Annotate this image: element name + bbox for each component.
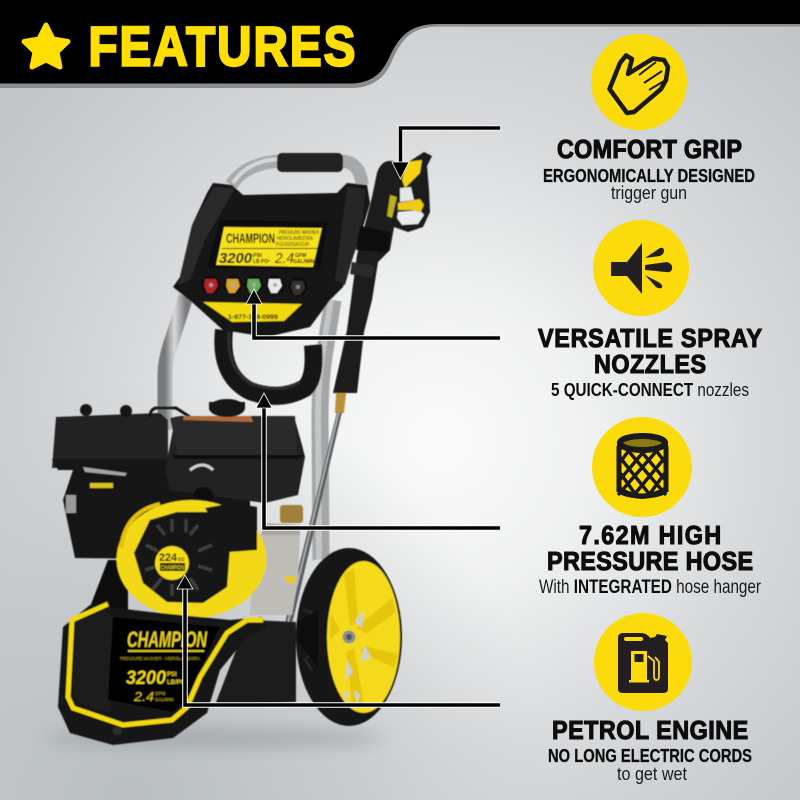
control panel: 3200 — [219, 250, 253, 267]
control panel: CHAMPION — [226, 230, 275, 246]
control panel: GPM — [295, 253, 306, 259]
base branding: GPM — [155, 691, 166, 696]
wheel — [296, 548, 402, 726]
callout arrow: spray nozzles — [246, 289, 500, 338]
title: FEATURES — [88, 16, 355, 78]
floor — [0, 380, 600, 800]
heading: NOZZLES — [594, 351, 706, 379]
panel label — [216, 227, 322, 267]
callout arrow: hose — [256, 393, 500, 528]
control panel — [173, 183, 370, 337]
base branding — [120, 627, 208, 704]
heading: COMFORT GRIP — [557, 136, 742, 164]
base branding: 2.4 — [133, 689, 154, 704]
description: 5 QUICK-CONNECT nozzles — [551, 379, 749, 400]
engine — [52, 399, 305, 612]
heading: PRESSURE HOSE — [547, 548, 753, 576]
hose coil — [223, 330, 314, 396]
frame tubes — [165, 153, 362, 560]
icon: spray — [593, 220, 689, 316]
control panel: PRESSURE WASHER — [279, 230, 319, 236]
icon: hand — [591, 34, 687, 130]
spray nozzles — [202, 276, 308, 296]
description: With INTEGRATED hose hanger — [539, 577, 762, 598]
base branding: 3200 — [126, 668, 166, 689]
spray gun and wand — [265, 152, 432, 706]
yellow instruction strip — [203, 302, 302, 322]
badge: 224cc: 224 — [159, 552, 178, 564]
recoil starter — [116, 500, 266, 618]
description: to get wet — [617, 764, 687, 784]
icon: petrol can — [594, 613, 692, 711]
heading: PETROL ENGINE — [552, 717, 748, 745]
header band — [0, 0, 800, 88]
callout arrow: petrol engine — [177, 575, 500, 705]
feature: hose — [539, 417, 762, 598]
badge: 224cc: cc — [178, 557, 185, 563]
base branding: LB/PO² — [167, 679, 187, 686]
heading: 7.62M HIGH — [579, 522, 721, 550]
description: ERGONOMICALLY DESIGNED — [543, 165, 755, 186]
base shell — [58, 604, 296, 745]
feature: comfort grip — [543, 34, 755, 203]
base branding: GAL/MIN — [155, 697, 174, 702]
callout arrow: comfort grip — [392, 128, 500, 179]
heading: VERSATILE SPRAY — [538, 325, 763, 353]
description: trigger gun — [611, 183, 687, 203]
control panel: PSI — [253, 253, 262, 259]
control panel: PULVERISATEUR — [276, 242, 309, 248]
control panel: LB PO² — [253, 259, 270, 265]
control panel: 1-877-338-0999 — [228, 315, 279, 321]
control panel: HIDROLAVADORA — [277, 236, 314, 242]
base branding: CHAMPION — [127, 627, 208, 652]
pressure washer product — [52, 152, 432, 745]
floor shadow — [45, 727, 385, 749]
control panel: GAL/MIN — [293, 259, 314, 265]
control panel: 2.4 — [274, 250, 294, 267]
feature: petrol engine — [548, 613, 752, 784]
base branding: PSI — [167, 672, 177, 678]
badge: 224cc: CHAMPION — [161, 564, 184, 572]
badge: 224cc — [155, 546, 189, 580]
pump — [250, 505, 303, 615]
icon: star — [24, 25, 68, 67]
description: NO LONG ELECTRIC CORDS — [548, 745, 752, 766]
base branding: PRESSURE WASHER · HIDROLAVADORA — [120, 656, 200, 661]
icon: hose coil — [592, 417, 692, 517]
feature: spray nozzles — [538, 220, 763, 400]
